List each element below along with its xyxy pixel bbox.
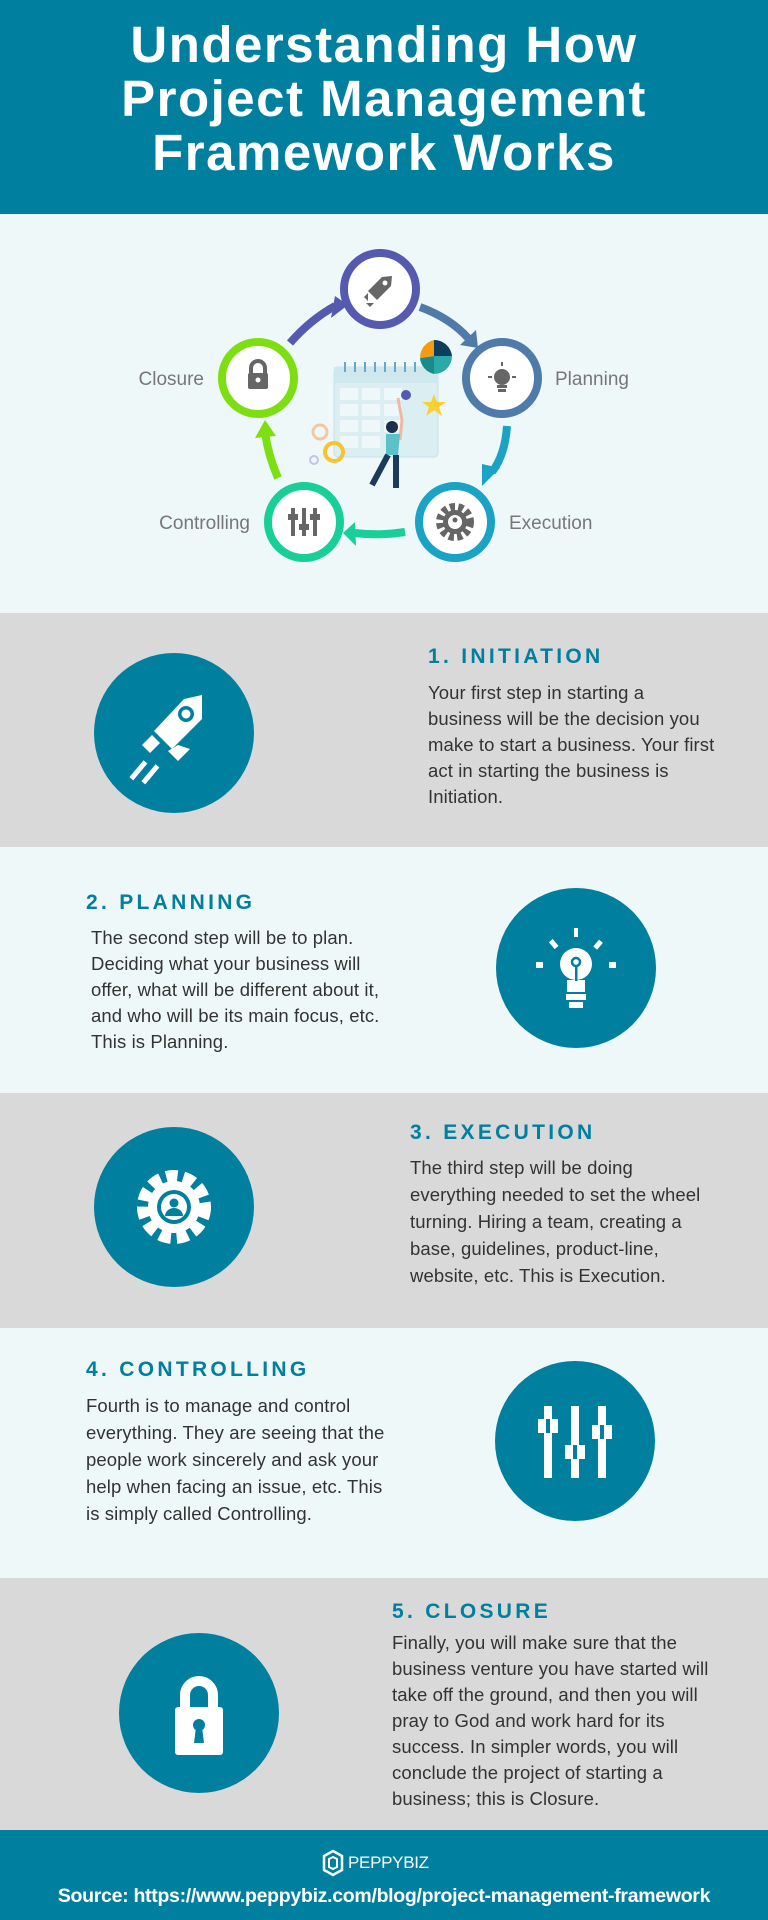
text: and who will be its main focus, etc. — [91, 1005, 379, 1026]
heading: 4. CONTROLLING — [86, 1358, 310, 1381]
text: offer, what will be different about it, — [91, 979, 379, 1000]
panel: 1 initiation — [0, 613, 768, 847]
text: This is Planning. — [91, 1031, 228, 1052]
header — [0, 0, 768, 214]
labels — [139, 369, 629, 534]
text: success. In simpler words, you will — [392, 1736, 678, 1757]
title — [121, 16, 647, 181]
labels: Controlling — [159, 513, 250, 534]
panel: 3 execution — [0, 1093, 768, 1328]
text: everything needed to set the wheel — [410, 1184, 700, 1205]
text — [428, 682, 714, 807]
logo: PEPPYBIZ — [348, 1853, 429, 1872]
text: Deciding what your business will — [91, 953, 361, 974]
hero: cycle diagram — [139, 249, 629, 562]
text: Your first step in starting a — [428, 682, 644, 703]
text: act in starting the business is — [428, 760, 669, 781]
heading: 1. INITIATION — [428, 645, 604, 668]
icon: sliders — [495, 1361, 655, 1521]
source: Source: https://www.peppybiz.com/blog/project-management-framework — [58, 1885, 710, 1907]
text: base, guidelines, product-line, — [410, 1238, 659, 1259]
title: Project Management — [121, 70, 647, 127]
arrows — [265, 306, 507, 534]
heading: 5. CLOSURE — [392, 1600, 551, 1623]
ring: initiation — [344, 253, 416, 325]
panel: 4 controlling — [0, 1328, 768, 1578]
text: business venture you have started will — [392, 1658, 708, 1679]
text: Finally, you will make sure that the — [392, 1632, 677, 1653]
labels: Closure — [139, 369, 204, 390]
text: is simply called Controlling. — [86, 1503, 312, 1524]
text: business; this is Closure. — [392, 1788, 599, 1809]
text: website, etc. This is Execution. — [410, 1265, 666, 1286]
title: Framework Works — [152, 124, 616, 181]
text: make to start a business. Your first — [428, 734, 714, 755]
text: help when facing an issue, etc. This — [86, 1476, 382, 1497]
logo — [322, 1850, 429, 1876]
footer — [0, 1830, 768, 1920]
calendar illustration — [310, 340, 452, 488]
text: everything. They are seeing that the — [86, 1422, 384, 1443]
text — [410, 1157, 700, 1286]
text: business will be the decision you — [428, 708, 700, 729]
icon: rocket — [94, 653, 254, 813]
text: Fourth is to manage and control — [86, 1395, 350, 1416]
title: Understanding How — [130, 16, 638, 73]
text: people work sincerely and ask your — [86, 1449, 378, 1470]
text: take off the ground, and then you will — [392, 1684, 698, 1705]
text — [91, 927, 379, 1052]
icon: gear — [94, 1127, 254, 1287]
ring: controlling — [268, 486, 340, 558]
ring: execution — [419, 486, 491, 558]
ring: planning — [466, 342, 538, 414]
text: conclude the project of starting a — [392, 1762, 663, 1783]
text — [86, 1395, 384, 1524]
labels: Execution — [509, 513, 592, 534]
panel: 5 closure — [0, 1578, 768, 1830]
icon: lock — [119, 1633, 279, 1793]
heading: 3. EXECUTION — [410, 1121, 595, 1144]
labels: Planning — [555, 369, 629, 390]
icon: bulb — [496, 888, 656, 1048]
text: pray to God and work hard for its — [392, 1710, 665, 1731]
text: Initiation. — [428, 786, 503, 807]
text: turning. Hiring a team, creating a — [410, 1211, 682, 1232]
text: The third step will be doing — [410, 1157, 633, 1178]
text — [392, 1632, 708, 1809]
panel: 2 planning — [0, 847, 768, 1093]
text: The second step will be to plan. — [91, 927, 353, 948]
ring: closure — [222, 342, 294, 414]
heading: 2. PLANNING — [86, 891, 255, 914]
